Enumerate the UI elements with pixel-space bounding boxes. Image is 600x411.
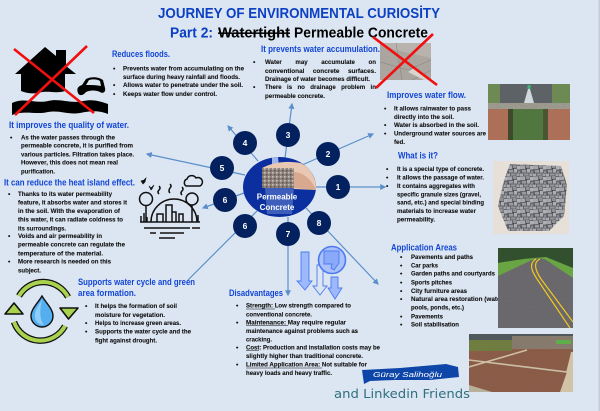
panel: disadvantages: Strength: Low strength compared to — [246, 303, 351, 310]
panel: improves quality of water: purification. — [21, 168, 55, 175]
numbered node 4: 4 — [243, 138, 248, 148]
panel: improves quality of water: It improves the quality of water. — [9, 120, 129, 130]
panel: disadvantages: Maintenance: May require regular — [246, 319, 346, 326]
panel: prevents water accumulation: • — [253, 84, 256, 91]
numbered node 6 lower — [233, 214, 257, 238]
panel: disadvantages — [229, 288, 380, 377]
panel: supports water cycle: moisture for vegetation. — [95, 312, 165, 319]
signature brush banner — [362, 364, 459, 384]
panel: supports water cycle: Supports water cycle and green — [78, 277, 195, 287]
panel: improves quality of water — [9, 120, 134, 175]
panel: application areas: Pavements — [411, 313, 443, 320]
panel: prevents water accumulation: conventional concrete surfaces. — [265, 68, 376, 75]
numbered node 2 — [316, 142, 340, 166]
panel: heat island effect: its surroundings. — [18, 225, 66, 232]
panel: disadvantages: conventional concrete. — [246, 311, 312, 318]
panel: disadvantages: cracking. — [246, 336, 272, 343]
title: Permeable Concrete — [294, 24, 428, 42]
panel: application areas: City furniture areas — [411, 288, 467, 295]
panel: what is it: It is a special type of concrete. — [397, 166, 484, 173]
title: Watertight — [218, 24, 290, 42]
panel: improves water flow — [384, 90, 486, 146]
icon: city under heat dome — [140, 176, 202, 238]
panel: application areas: pools, ponds, etc.) — [411, 305, 464, 312]
panel: prevents water accumulation: Drainage of water becomes difficult. — [265, 76, 370, 83]
signature brush banner: Güray Salihoğlu — [373, 370, 443, 379]
panel: what is it: • — [386, 175, 389, 182]
title: Part 2: — [170, 24, 213, 42]
connector arrows — [147, 104, 385, 295]
panel: disadvantages: maintenance against problems such as — [246, 328, 358, 335]
panel: what is it: It allows the passage of water. — [397, 175, 484, 182]
panel: heat island effect: feature, it absorbs water and stores it — [18, 200, 128, 207]
panel: heat island effect: temperature of the material. — [18, 250, 103, 257]
numbered node 7: 7 — [286, 229, 291, 239]
panel: heat island effect: More research is needed on this — [18, 259, 111, 266]
panel: what is it: materials to increase water — [397, 208, 476, 215]
panel: supports water cycle: It helps the formation of soil — [95, 303, 177, 310]
panel: disadvantages: • — [236, 362, 239, 369]
central hub: permeable concrete — [243, 157, 317, 217]
panel: reduces floods: surface during heavy rainfall and floods. — [123, 74, 240, 81]
panel: what is it: It contains aggregates with — [397, 183, 475, 190]
numbered node 8 — [307, 211, 331, 235]
panel: prevents water accumulation: It prevents water accumulation. — [261, 44, 380, 54]
panel: supports water cycle: Supports the water cycle and the — [95, 329, 191, 336]
panel: disadvantages: Limited Application Area: Not suitable for — [246, 362, 367, 369]
panel: application areas: • — [400, 296, 403, 303]
numbered node 2: 2 — [326, 149, 331, 159]
numbered node 6 upper: 6 — [223, 195, 228, 205]
panel: improves water flow: • — [384, 122, 387, 129]
numbered node 3 — [276, 123, 300, 147]
photo: permeable concrete block — [493, 161, 569, 234]
panel: supports water cycle: Helps to increase green areas. — [95, 320, 181, 327]
panel: prevents water accumulation — [253, 44, 380, 100]
panel: supports water cycle — [78, 277, 195, 344]
photo: asphalt road with yellow lines — [498, 248, 573, 328]
panel: application areas: • — [400, 313, 403, 320]
panel: disadvantages: slightly higher than traditional concrete. — [246, 353, 363, 360]
numbered node 1: 1 — [336, 182, 341, 192]
panel: what is it: specific granule sizes (gravel, — [397, 191, 481, 198]
panel: application areas: Car parks — [411, 263, 438, 270]
numbered node 1 — [326, 175, 350, 199]
panel: prevents water accumulation: There is no drainage problem in — [265, 84, 376, 91]
panel: supports water cycle: area formation. — [78, 288, 136, 298]
numbered node 6 lower: 6 — [243, 221, 248, 231]
panel: improves water flow: directly into the soil. — [394, 114, 454, 121]
panel: supports water cycle: • — [85, 329, 88, 336]
panel: supports water cycle: fight against drought. — [95, 337, 157, 344]
panel: prevents water accumulation: Water may accumulate on — [265, 59, 376, 66]
panel: disadvantages: Cost: Production and installation costs may be — [246, 344, 380, 351]
numbered node 3: 3 — [286, 130, 291, 140]
panel: disadvantages: Disadvantages — [229, 288, 283, 298]
panel: improves quality of water: As the water passes through the — [21, 134, 115, 141]
numbered node 5: 5 — [220, 163, 225, 173]
panel: prevents water accumulation: • — [253, 59, 256, 66]
panel: application areas — [391, 242, 503, 328]
panel: reduces floods: • — [113, 66, 116, 72]
panel: what is it: • — [386, 183, 389, 190]
panel: disadvantages: • — [236, 319, 239, 326]
panel: reduces floods — [112, 49, 244, 98]
panel: reduces floods: Reduces floods. — [112, 49, 170, 59]
panel: improves quality of water: However, this does not mean real — [21, 160, 118, 167]
panel: application areas: Application Areas — [391, 242, 457, 252]
panel: improves water flow: It allows rainwater to pass — [394, 106, 471, 112]
panel: heat island effect: permeable concrete can regulate the — [18, 242, 125, 249]
panel: what is it: What is it? — [398, 150, 438, 160]
panel: improves water flow: Underground water sources are — [394, 130, 486, 138]
panel: heat island effect: this water, it can radiate coldness to — [18, 217, 123, 224]
panel: improves quality of water: permeable concrete, it is purified from — [21, 143, 133, 150]
panel: reduces floods: • — [113, 82, 116, 89]
panel: application areas: • — [400, 263, 403, 270]
panel: application areas: Sports pitches — [411, 279, 452, 286]
central hub: permeable concrete: Permeable — [257, 192, 298, 202]
title: JOURNEY OF ENVIRONMENTAL CURIOSİTY — [158, 5, 440, 22]
panel: reduces floods: Prevents water from accumulating on the — [123, 66, 244, 72]
panel: what is it: • — [386, 166, 389, 173]
panel: improves water flow: • — [384, 106, 387, 112]
panel: improves quality of water: various particles. Filtration takes place. — [21, 151, 134, 158]
photo: puddled concrete crossed out — [373, 34, 437, 88]
photo: permeable paved car park — [469, 334, 573, 392]
panel: reduces floods: Allows water to penetrate under the soil. — [123, 82, 243, 89]
panel: what is it — [386, 150, 484, 224]
panel: heat island effect — [4, 178, 135, 274]
panel: application areas: Pavements and paths — [411, 254, 473, 261]
panel: heat island effect: Voids and air permeability in — [18, 233, 102, 240]
numbered node 4 — [233, 131, 257, 155]
panel: disadvantages: heavy loads and heavy traffic. — [246, 370, 332, 377]
panel: application areas: • — [400, 279, 403, 286]
panel: supports water cycle: • — [85, 320, 88, 327]
panel: what is it: sand, etc.) and special binding — [397, 200, 484, 207]
icon: flooded house crossed out — [12, 46, 108, 115]
panel: supports water cycle: • — [85, 303, 88, 310]
panel: disadvantages: • — [236, 344, 239, 351]
panel: heat island effect: in the soil. With the evaporation of — [18, 208, 121, 215]
panel: heat island effect: subject. — [18, 267, 41, 274]
panel: prevents water accumulation: permeable concrete. — [265, 93, 325, 100]
panel: application areas: • — [400, 321, 403, 328]
panel: disadvantages: • — [236, 303, 239, 310]
title — [158, 5, 440, 42]
panel: heat island effect: • — [8, 233, 11, 240]
panel: application areas: • — [400, 288, 403, 295]
numbered node 8: 8 — [317, 218, 322, 228]
central hub: permeable concrete: Concrete — [260, 203, 295, 212]
credit line: and Linkedin Friends — [334, 387, 470, 401]
panel: application areas: Garden paths and courtyards — [411, 271, 495, 278]
numbered node 5 — [210, 156, 234, 180]
panel: improves water flow: Water is absorbed in the soil. — [394, 122, 479, 129]
panel: application areas: • — [400, 271, 403, 278]
panel: reduces floods: • — [113, 91, 116, 98]
photo: water passing through permeable slab — [488, 84, 570, 140]
numbered node 6 upper — [213, 188, 237, 212]
panel: improves water flow: fed. — [394, 139, 405, 146]
panel: what is it: permeability. — [397, 217, 435, 224]
panel: improves water flow: Improves water flow. — [387, 90, 466, 100]
panel: improves quality of water: • — [10, 134, 13, 141]
icon: water cycle — [5, 282, 78, 341]
panel: application areas: Soil stabilisation — [411, 321, 459, 328]
icon: thumbs down with downward arrows — [297, 246, 346, 299]
panel: heat island effect: • — [8, 259, 11, 266]
panel: application areas: Natural area restoration (water — [411, 296, 503, 303]
panel: application areas: • — [400, 254, 403, 261]
numbered node 7 — [276, 222, 300, 246]
panel: improves water flow: • — [384, 130, 387, 138]
panel: heat island effect: • — [8, 191, 11, 198]
panel: heat island effect: It can reduce the heat island effect. — [4, 178, 135, 188]
panel: reduces floods: Keeps water flow under control. — [123, 91, 217, 98]
panel: heat island effect: Thanks to its water permeability — [18, 191, 112, 198]
